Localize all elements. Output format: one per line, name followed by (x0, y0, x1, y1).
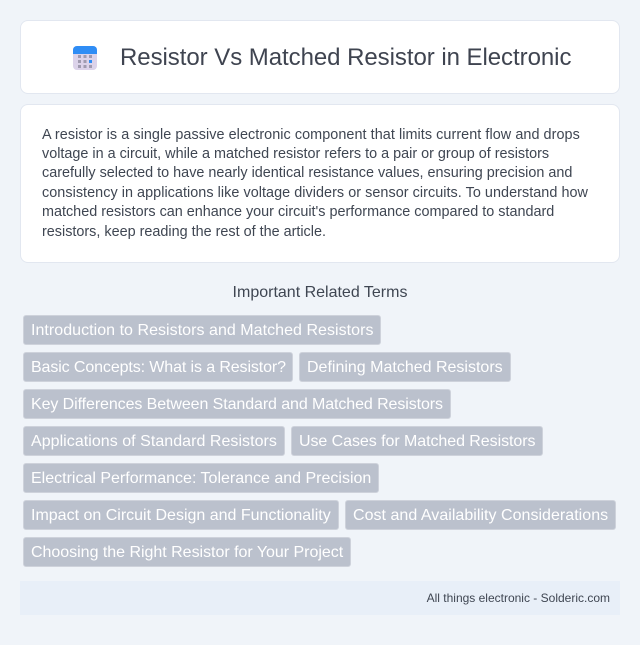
chip: cost (345, 500, 616, 530)
footer bar (20, 581, 620, 615)
description text: carefully selected to have nearly identical resistance values, ensuring precision and (42, 164, 572, 180)
description text: voltage in a circuit, while a matched resistor refers to a pair or group of resistors (42, 146, 549, 162)
chip: basic concepts (23, 352, 293, 382)
chip: defining (299, 352, 511, 382)
chip: impact: Impact on Circuit Design and Functionality (31, 507, 331, 524)
chip: applications (23, 426, 285, 456)
chip: choosing (23, 537, 351, 567)
chip: defining: Defining Matched Resistors (307, 359, 503, 376)
title card (20, 20, 620, 94)
chip: cost: Cost and Availability Considerations (353, 507, 608, 524)
chip: introduction (23, 315, 381, 345)
description text: consistency in applications like voltage dividers or sensor circuits. To understand how (42, 184, 588, 200)
chip: introduction: Introduction to Resistors and Matched Resistors (31, 322, 373, 339)
chip: use cases: Use Cases for Matched Resistors (299, 433, 535, 450)
chip: electrical performance: Electrical Performance: Tolerance and Precision (31, 470, 371, 487)
chip: electrical performance (23, 463, 379, 493)
chip: applications: Applications of Standard Resistors (31, 433, 277, 450)
chip: key differences: Key Differences Between Standard and Matched Resistors (31, 396, 443, 413)
title: Resistor Vs Matched Resistor in Electronic (120, 44, 571, 71)
chip: use cases (291, 426, 543, 456)
chip: choosing: Choosing the Right Resistor for Your Project (31, 544, 343, 561)
description text: resistors, keep reading the rest of the article. (42, 224, 326, 240)
description text: A resistor is a single passive electronic component that limits current flow and drops (42, 126, 580, 142)
description card (20, 104, 620, 263)
chip: key differences (23, 389, 451, 419)
chip: basic concepts: Basic Concepts: What is a Resistor? (31, 359, 286, 376)
related terms heading: Important Related Terms (233, 284, 407, 301)
description text: matched resistors can enhance your circuit's performance compared to standard (42, 204, 554, 220)
chip: impact (23, 500, 339, 530)
footer text: All things electronic - Solderic.com (427, 591, 610, 605)
description text (42, 126, 588, 240)
icon: calendar (73, 46, 97, 70)
